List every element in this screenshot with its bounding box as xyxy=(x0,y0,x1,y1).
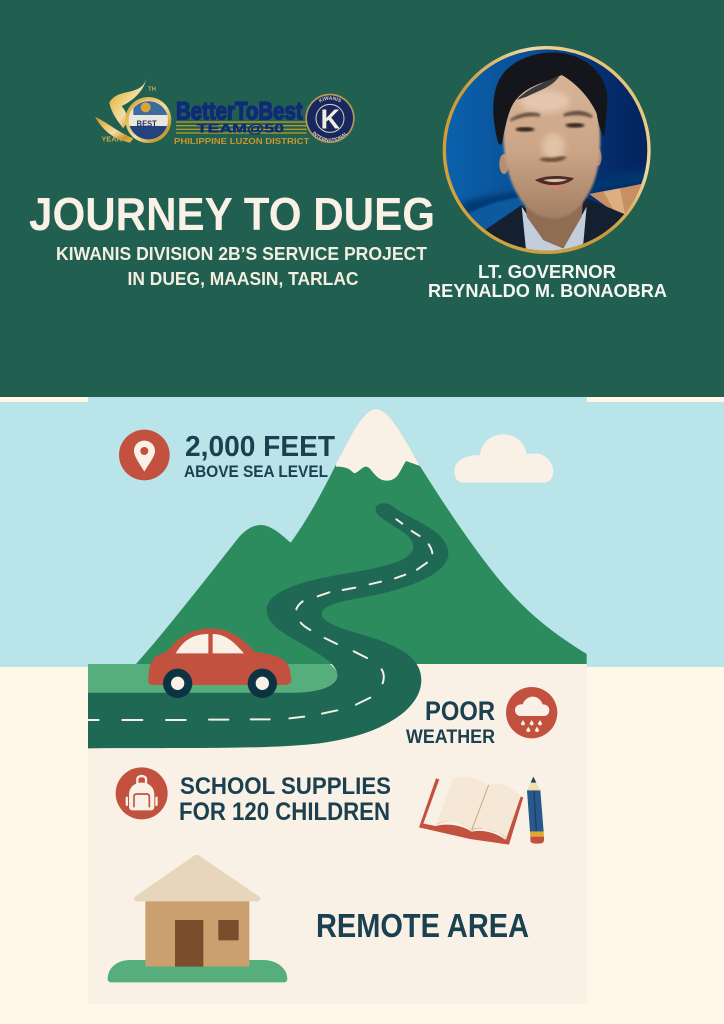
book cover xyxy=(419,778,523,845)
face xyxy=(503,72,600,219)
central sky column xyxy=(88,397,587,667)
book pages right xyxy=(472,784,521,838)
cloud xyxy=(454,434,553,483)
facial highlights xyxy=(542,133,565,161)
backpack icon xyxy=(116,767,168,819)
label: 2,000 feet: 2,000 FEET xyxy=(185,431,335,463)
mountain xyxy=(136,409,587,664)
car wheel front xyxy=(248,669,277,698)
rain cloud icon xyxy=(506,687,557,738)
portrait photo of Lt. Governor xyxy=(443,47,650,260)
roof xyxy=(134,855,260,901)
seal letter K: K xyxy=(321,103,340,134)
sky band xyxy=(0,402,724,667)
logo text: philippine luzon district: PHILIPPINE LUZON DISTRICT xyxy=(174,136,309,146)
book page shading xyxy=(436,820,507,840)
lower panel xyxy=(88,664,587,1004)
logo text: year: YEAR xyxy=(101,134,123,143)
logo text: th: TH xyxy=(148,87,156,93)
subtitle line 1: KIWANIS DIVISION 2B’S SERVICE PROJECT xyxy=(56,244,427,264)
door xyxy=(175,920,203,967)
pencil xyxy=(527,777,544,844)
book spine line xyxy=(472,785,489,830)
car window left xyxy=(176,634,208,653)
logo: Better To Best Team@50 xyxy=(95,78,355,146)
logo: gold 50th anniversary emblem xyxy=(95,77,171,143)
nose shadow xyxy=(539,156,567,162)
house illustration xyxy=(108,855,287,982)
house wall xyxy=(145,900,249,967)
logo text: BetterToBest: BetterToBest xyxy=(176,97,303,125)
name caption: name: REYNALDO M. BONAOBRA xyxy=(428,281,667,301)
logo text: best: BEST xyxy=(137,118,157,128)
book base xyxy=(435,825,508,844)
label: above sea level: ABOVE SEA LEVEL xyxy=(184,462,328,481)
label: poor: POOR xyxy=(425,696,495,726)
neck xyxy=(525,197,583,248)
name caption: title: LT. GOVERNOR xyxy=(478,262,616,282)
label: for 120 children: FOR 120 CHILDREN xyxy=(179,798,390,826)
car window right xyxy=(213,634,244,653)
seal text: kiwanis: KIWANIS xyxy=(318,96,342,102)
cream edge strips xyxy=(0,397,88,402)
ground xyxy=(108,960,287,982)
car xyxy=(148,628,291,698)
mountain snow cap xyxy=(336,409,420,481)
eyes xyxy=(516,127,534,132)
cream edge strip right xyxy=(587,397,724,402)
car wheel rear xyxy=(163,669,192,698)
scene: mountains, road and car xyxy=(88,409,587,748)
seal text: international: INTERNATIONAL xyxy=(312,131,348,142)
winding road xyxy=(88,503,448,748)
car body xyxy=(148,628,291,685)
gold photo ring xyxy=(444,48,649,252)
logo: Kiwanis International seal xyxy=(305,94,355,143)
subtitle line 2: IN DUEG, MAASIN, TARLAC xyxy=(128,269,358,289)
label: school supplies: SCHOOL SUPPLIES xyxy=(180,773,391,800)
logo text: team@50: TEAM@50 xyxy=(197,121,284,135)
jacket xyxy=(486,198,624,250)
pin icon xyxy=(119,430,170,480)
eyebrows xyxy=(510,112,540,121)
window xyxy=(218,920,239,940)
shirt collar xyxy=(522,206,587,251)
grass strip xyxy=(88,664,337,693)
mouth xyxy=(535,176,574,185)
ears xyxy=(499,154,509,174)
book pages left xyxy=(436,777,489,829)
road centre dashes xyxy=(88,519,432,720)
header band xyxy=(0,0,724,397)
logo: stripes xyxy=(176,121,307,134)
label: weather: WEATHER xyxy=(406,727,495,748)
title: JOURNEY TO DUEG xyxy=(29,188,435,240)
icon: open book and pencil xyxy=(419,777,544,845)
hair xyxy=(493,52,608,145)
label: remote area: REMOTE AREA xyxy=(316,907,529,944)
